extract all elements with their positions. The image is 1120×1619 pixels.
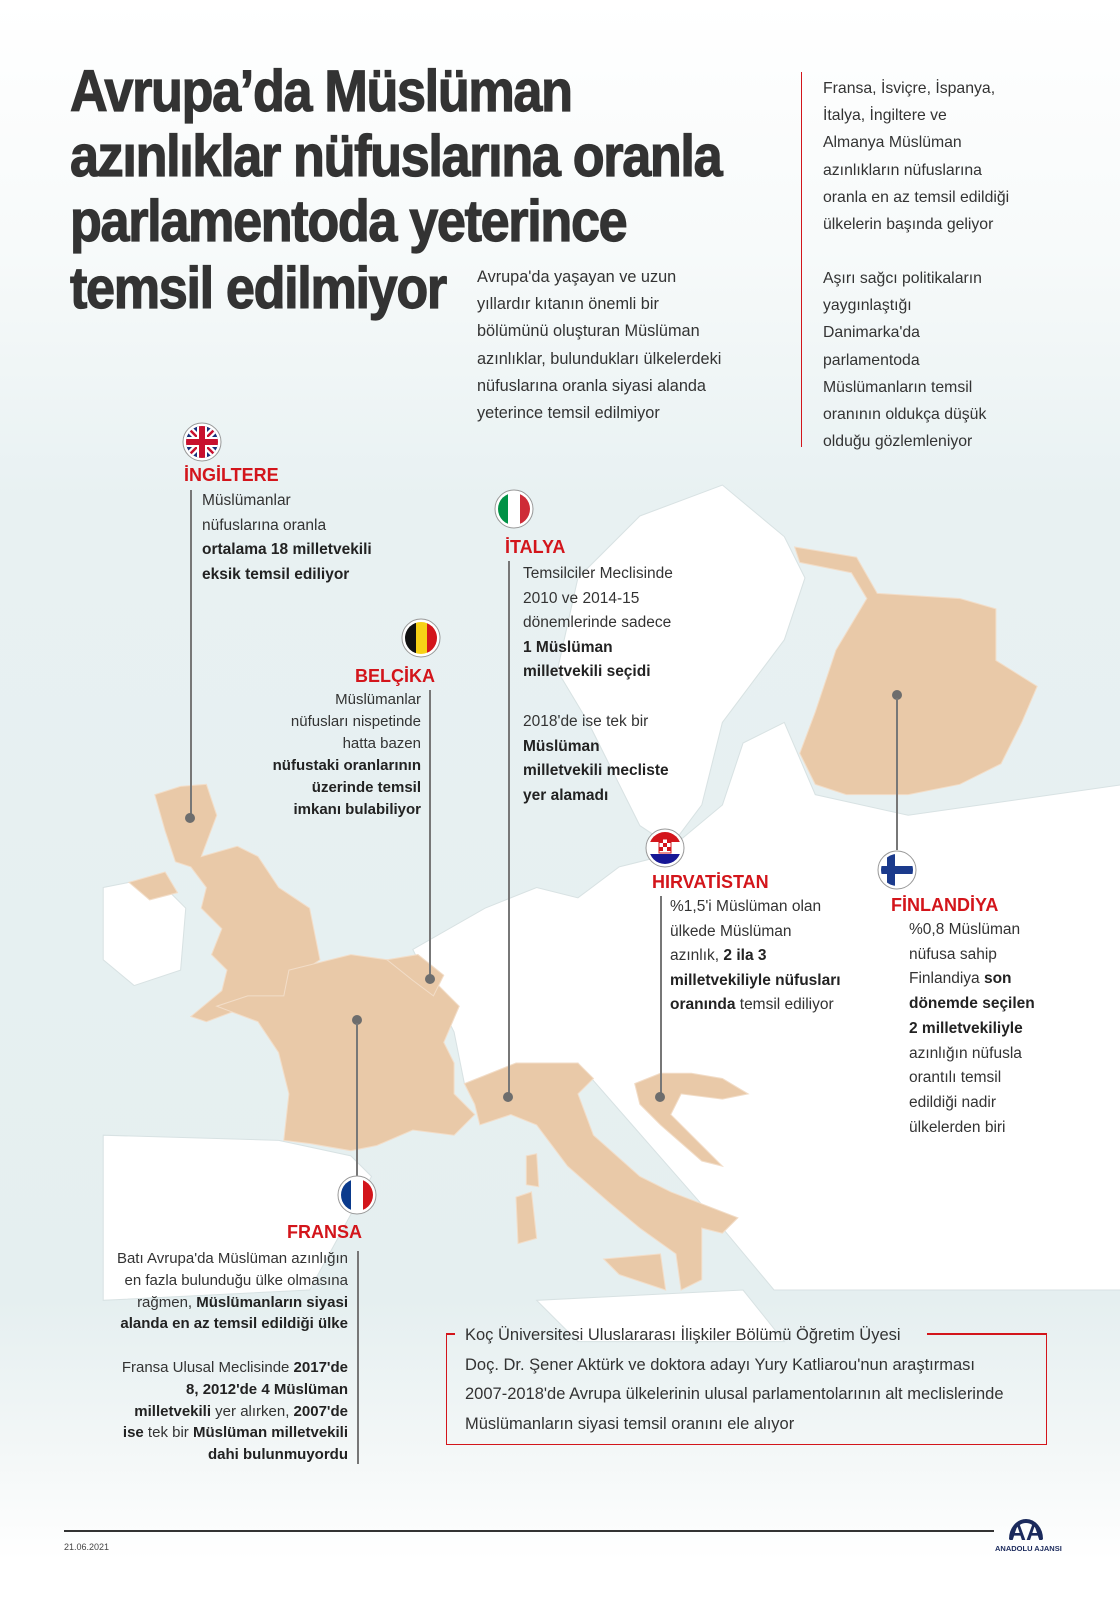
- panel: Fransa: Fransa Ulusal Meclisinde 2017'de: [122, 1359, 348, 1376]
- panel: Hırvatistan: ülkede Müslüman: [670, 922, 791, 940]
- panel: İtalya: [494, 490, 673, 1102]
- panel: Finlandiya: Finlandiya son: [909, 970, 1012, 987]
- panel: İtalya: İTALYA: [505, 537, 565, 557]
- panel: İtalya: 2010 ve 2014-15: [523, 590, 639, 607]
- intro text: yeterince temsil edilmiyor: [477, 404, 660, 422]
- side note: Fransa, İsviçre, İspanya,: [823, 80, 995, 97]
- side note: oranının oldukça düşük: [823, 406, 986, 423]
- panel: Hırvatistan: milletvekiliyle nüfusları: [670, 972, 841, 988]
- logo: Anadolu Ajansı: ANADOLU AJANSI: [995, 1544, 1062, 1553]
- title: [70, 59, 724, 321]
- footer line: [64, 1530, 994, 1532]
- panel: Fransa: milletvekili yer alırken, 2007'de: [134, 1403, 348, 1420]
- panel: Fransa: FRANSA: [287, 1222, 362, 1242]
- title: parlamentoda yeterince: [70, 189, 626, 254]
- panel: İtalya: milletvekili seçidi: [523, 663, 651, 680]
- panel: Finlandiya: edildiği nadir: [909, 1094, 996, 1111]
- side note: İtalya, İngiltere ve: [823, 107, 947, 124]
- panel: Finlandiya: orantılı temsil: [909, 1069, 1001, 1086]
- side note: Müslümanların temsil: [823, 379, 972, 396]
- panel: İtalya: 2018'de ise tek bir: [523, 713, 648, 730]
- panel: Belçika: hatta bazen: [343, 735, 421, 752]
- source box: 2007-2018'de Avrupa ülkelerinin ulusal parlamentolarının alt meclislerinde: [465, 1385, 1004, 1403]
- panel: İngiltere: eksik temsil ediliyor: [202, 566, 349, 582]
- panel: Finlandiya: 2 milletvekiliyle: [909, 1020, 1023, 1037]
- side note: ülkelerin başında geliyor: [823, 216, 993, 233]
- panel: Fransa: Batı Avrupa'da Müslüman azınlığın: [117, 1250, 348, 1267]
- panel: Finlandiya: ülkelerden biri: [909, 1119, 1006, 1136]
- source box: Doç. Dr. Şener Aktürk ve doktora adayı Yury Katliarou'nun araştırması: [465, 1356, 975, 1374]
- side note: olduğu gözlemleniyor: [823, 433, 972, 450]
- side note: Almanya Müslüman: [823, 134, 962, 151]
- panel: Finlandiya: %0,8 Müslüman: [909, 921, 1020, 938]
- side note: [801, 72, 1102, 447]
- panel: Finlandiya: nüfusa sahip: [909, 946, 997, 963]
- title: Avrupa’da Müslüman: [70, 59, 572, 124]
- panel: İtalya: Müslüman: [523, 738, 600, 755]
- intro text: Avrupa'da yaşayan ve uzun: [477, 268, 676, 286]
- panel: İngiltere: nüfuslarına oranla: [202, 516, 326, 534]
- panel: İngiltere: [182, 422, 372, 823]
- side note: Danimarka'da: [823, 324, 920, 341]
- intro text: [477, 268, 721, 422]
- panel: Hırvatistan: azınlık, 2 ila 3: [670, 947, 767, 964]
- side note: Aşırı sağcı politikaların: [823, 270, 982, 287]
- source box: Koç Üniversitesi Uluslararası İlişkiler Bölümü Öğretim Üyesi: [465, 1326, 901, 1344]
- side note: parlamentoda: [823, 352, 920, 369]
- panel: Fransa: en fazla bulunduğu ülke olmasına: [124, 1272, 348, 1289]
- intro text: yıllardır kıtanın önemli bir: [477, 295, 659, 313]
- intro text: nüfuslarına oranla siyasi alanda: [477, 377, 706, 395]
- intro text: azınlıklar, bulundukları ülkelerdeki: [477, 350, 721, 368]
- source box: Müslümanların siyasi temsil oranını ele alıyor: [465, 1415, 794, 1433]
- panel: Hırvatistan: oranında temsil ediliyor: [670, 996, 834, 1013]
- panel: Finlandiya: FİNLANDİYA: [891, 895, 998, 915]
- panel: Hırvatistan: HIRVATİSTAN: [652, 872, 769, 892]
- panel: Finlandiya: azınlığın nüfusla: [909, 1045, 1022, 1062]
- panel: Belçika: BELÇİKA: [355, 666, 435, 686]
- panel: Fransa: ise tek bir Müslüman milletvekili: [123, 1424, 348, 1441]
- logo: Anadolu Ajansı: [995, 1519, 1062, 1553]
- panel: Belçika: nüfusları nispetinde: [291, 713, 421, 730]
- panel: Fransa: rağmen, Müslümanların siyasi: [137, 1294, 348, 1311]
- panel: Belçika: üzerinde temsil: [312, 779, 421, 796]
- panel: Hırvatistan: %1,5'i Müslüman olan: [670, 898, 821, 915]
- title: temsil edilmiyor: [70, 256, 446, 321]
- panel: İtalya: yer alamadı: [523, 787, 608, 804]
- panel: İngiltere: İNGİLTERE: [184, 465, 279, 485]
- side note: oranla en az temsil edildiği: [823, 189, 1009, 206]
- panel: Fransa: dahi bulunmuyordu: [208, 1446, 348, 1463]
- panel: Fransa: alanda en az temsil edildiği ülke: [120, 1315, 348, 1332]
- title: azınlıklar nüfuslarına oranla: [70, 124, 721, 189]
- panel: Finlandiya: dönemde seçilen: [909, 995, 1035, 1012]
- panel: İtalya: 1 Müslüman: [523, 639, 613, 656]
- panel: İngiltere: Müslümanlar: [202, 492, 291, 509]
- panel: Finlandiya: [878, 690, 1035, 1136]
- intro text: bölümünü oluşturan Müslüman: [477, 322, 700, 340]
- panel: Belçika: imkanı bulabiliyor: [293, 801, 421, 818]
- panel: Belçika: Müslümanlar: [335, 691, 421, 708]
- side note: yaygınlaştığı: [823, 297, 912, 314]
- panel: Belçika: nüfustaki oranlarının: [273, 757, 421, 774]
- panel: Hırvatistan: [646, 828, 841, 1102]
- panel: İtalya: dönemlerinde sadece: [523, 614, 671, 631]
- side note: azınlıkların nüfuslarına: [823, 162, 982, 179]
- panel: İtalya: milletvekili mecliste: [523, 762, 669, 779]
- panel: Fransa: [117, 1015, 376, 1464]
- panel: Fransa: 8, 2012'de 4 Müslüman: [186, 1381, 348, 1398]
- panel: İngiltere: ortalama 18 milletvekili: [202, 541, 372, 558]
- source box: [446, 1333, 1047, 1445]
- date: 21.06.2021: [64, 1542, 109, 1552]
- panel: İtalya: Temsilciler Meclisinde: [523, 565, 673, 582]
- panel: Belçika: [273, 618, 440, 984]
